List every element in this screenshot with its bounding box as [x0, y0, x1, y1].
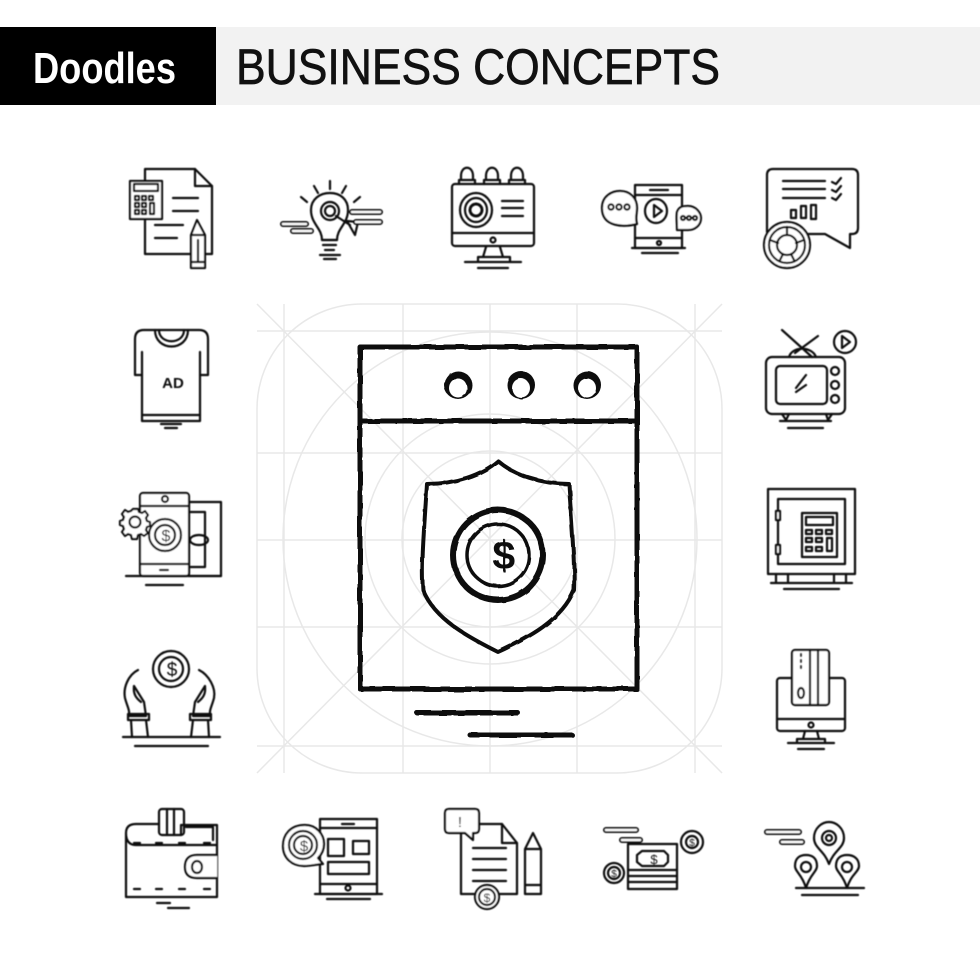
icon: banknote stack with coins: $	[689, 838, 695, 849]
icon: phone, money and gear	[120, 493, 221, 585]
icon: phone with coin bubble: $	[300, 838, 309, 855]
icon: monitor with credit card	[777, 650, 845, 749]
icon: safe with keypad	[768, 489, 855, 589]
background construction grid	[257, 304, 722, 773]
icon: document with alert and pencil: !	[458, 814, 462, 831]
icon: retro tv with play button	[766, 330, 856, 428]
icon: document, calculator and pencil	[130, 169, 212, 268]
icon: t-shirt AD: AD	[162, 375, 184, 392]
icon: document with alert and pencil	[445, 809, 541, 909]
title: Business Concepts: BUSINESS CONCEPTS	[236, 39, 720, 95]
header band	[0, 27, 980, 105]
icon: hands with coin: $	[167, 660, 178, 681]
icon: location pins	[767, 822, 864, 895]
main icon: browser window with dollar shield	[360, 347, 637, 735]
icon: banknote stack with coins: $	[611, 869, 617, 880]
icon: phone with coin bubble	[283, 819, 382, 899]
icon: wallet	[126, 809, 217, 908]
icon: banknote stack with coins: $	[650, 852, 658, 867]
dollar coin: $	[493, 534, 515, 578]
ground shadows	[417, 713, 572, 735]
icon: light bulb target	[283, 181, 380, 259]
icon: phone with chat bubbles	[602, 185, 701, 253]
label: Doodles: Doodles	[33, 44, 176, 93]
dollar coin	[453, 510, 543, 600]
icon: hands with coin	[123, 651, 220, 746]
icon: phone, money and gear: $	[162, 528, 171, 545]
icon: monitor dashboard with bells	[452, 168, 534, 268]
shield	[422, 461, 574, 652]
icon: banknote stack with coins	[604, 830, 703, 889]
icon: chat card with chart	[764, 169, 858, 268]
icon: document with alert and pencil: $	[484, 891, 491, 905]
window buttons	[444, 371, 601, 399]
icon: t-shirt AD	[135, 330, 208, 428]
